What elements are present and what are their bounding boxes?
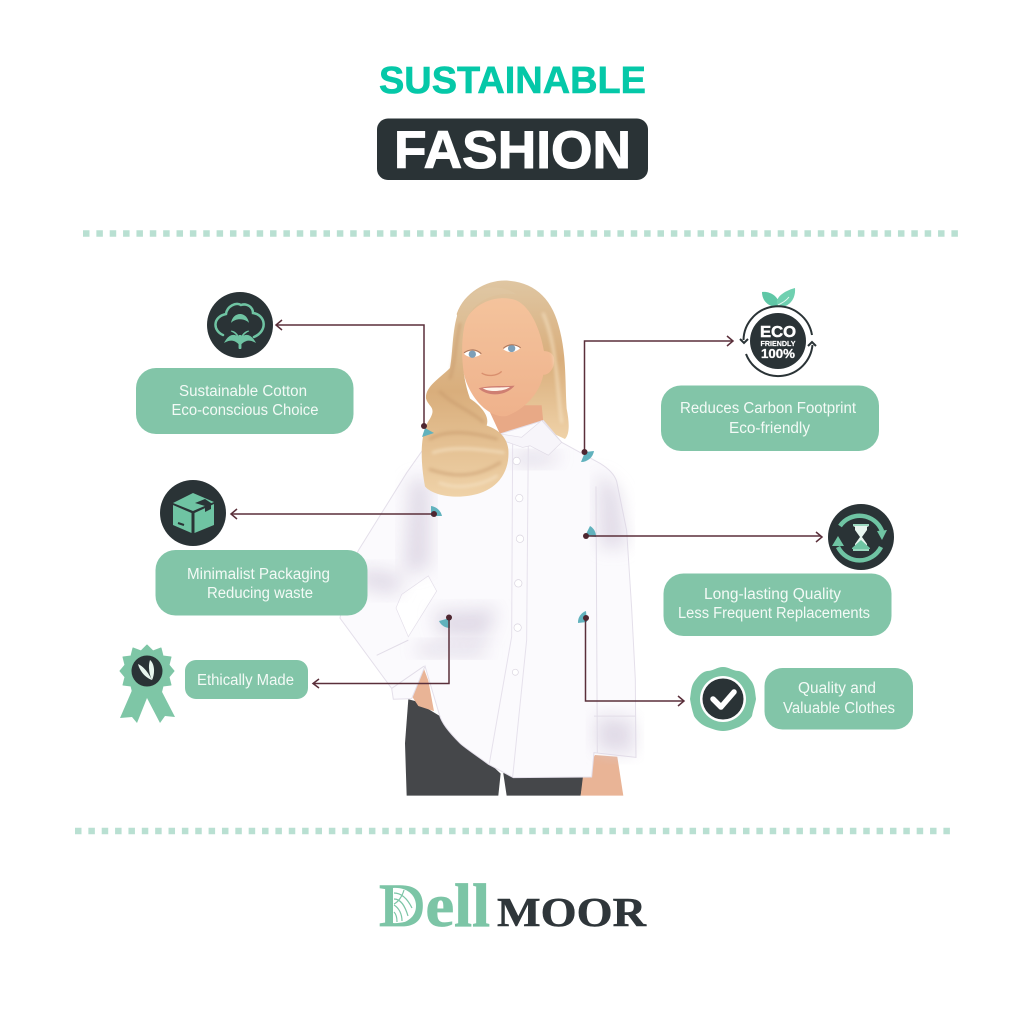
panel: sustainable cotton: Sustainable Cotton bbox=[179, 383, 307, 400]
neck bbox=[487, 405, 543, 436]
title line: SUSTAINABLE: SUSTAINABLE bbox=[379, 60, 646, 102]
panel: minimalist packaging bbox=[156, 550, 368, 616]
logo: Dellmoor bbox=[379, 873, 646, 940]
arm gap bbox=[396, 576, 437, 637]
panel: ethically made bbox=[185, 660, 308, 699]
panel: reduces carbon footprint bbox=[661, 386, 879, 451]
panel: sustainable cotton bbox=[136, 368, 354, 434]
panel: quality and valuable clothes bbox=[764, 668, 913, 730]
connector dots bbox=[421, 423, 589, 621]
icon: eco friendly 100% seal: ECO bbox=[760, 324, 796, 341]
icon: cotton plant bbox=[207, 292, 273, 358]
collar bbox=[500, 420, 562, 455]
mouth bbox=[479, 386, 515, 394]
panel: long-lasting quality bbox=[664, 574, 892, 636]
nose bbox=[482, 371, 502, 375]
logo word: MOOR: MOOR bbox=[497, 889, 646, 935]
title badge: FASHION: FASHION bbox=[394, 121, 631, 180]
panel: ethically made: Ethically Made bbox=[197, 672, 294, 689]
eyes bbox=[464, 345, 521, 358]
panel: quality and valuable clothes: Valuable Clothes bbox=[783, 700, 895, 717]
icon: eco friendly 100% seal bbox=[740, 288, 816, 376]
icon: cardboard box bbox=[160, 480, 226, 546]
logo word: Dell: Dell bbox=[379, 873, 490, 940]
hair strands bbox=[430, 314, 562, 486]
icon: hourglass with cycle arrows bbox=[828, 504, 894, 570]
title bbox=[377, 60, 648, 180]
model illustration: girl in white shirt bbox=[340, 281, 636, 796]
circular arrows bbox=[744, 306, 812, 376]
panel: reduces carbon footprint: Eco-friendly bbox=[729, 420, 810, 437]
panel: long-lasting quality: Less Frequent Replacements bbox=[678, 605, 870, 622]
jeans bbox=[405, 699, 585, 796]
icon: eco friendly 100% seal: 100% bbox=[761, 346, 795, 361]
panel: minimalist packaging: Minimalist Packaging bbox=[187, 566, 330, 583]
panel: long-lasting quality: Long-lasting Quality bbox=[704, 586, 841, 603]
hotspot markers and connectors bbox=[231, 320, 822, 706]
panel: reduces carbon footprint: Reduces Carbon Footprint bbox=[680, 400, 857, 417]
shirt buttons bbox=[512, 457, 524, 675]
shirt shading bbox=[360, 453, 633, 753]
icon: quality check badge bbox=[690, 667, 756, 731]
connector lines bbox=[231, 320, 822, 706]
shirt bbox=[340, 420, 636, 778]
leaves bbox=[762, 288, 795, 307]
cuff and seam lines bbox=[377, 486, 635, 753]
face bbox=[461, 298, 554, 416]
marker wedges bbox=[422, 428, 596, 628]
hair back bbox=[457, 281, 569, 439]
shirt placket bbox=[489, 442, 528, 777]
panel: minimalist packaging: Reducing waste bbox=[207, 585, 313, 602]
hair front bbox=[422, 287, 517, 497]
panel: sustainable cotton: Eco-conscious Choice bbox=[172, 402, 318, 419]
logo yarn ball bbox=[393, 888, 416, 923]
hands bbox=[402, 667, 623, 796]
icon: ethical ribbon badge bbox=[120, 645, 175, 723]
icon: eco friendly 100% seal: FRIENDLY bbox=[760, 339, 796, 348]
panel: quality and valuable clothes: Quality and bbox=[798, 680, 876, 697]
